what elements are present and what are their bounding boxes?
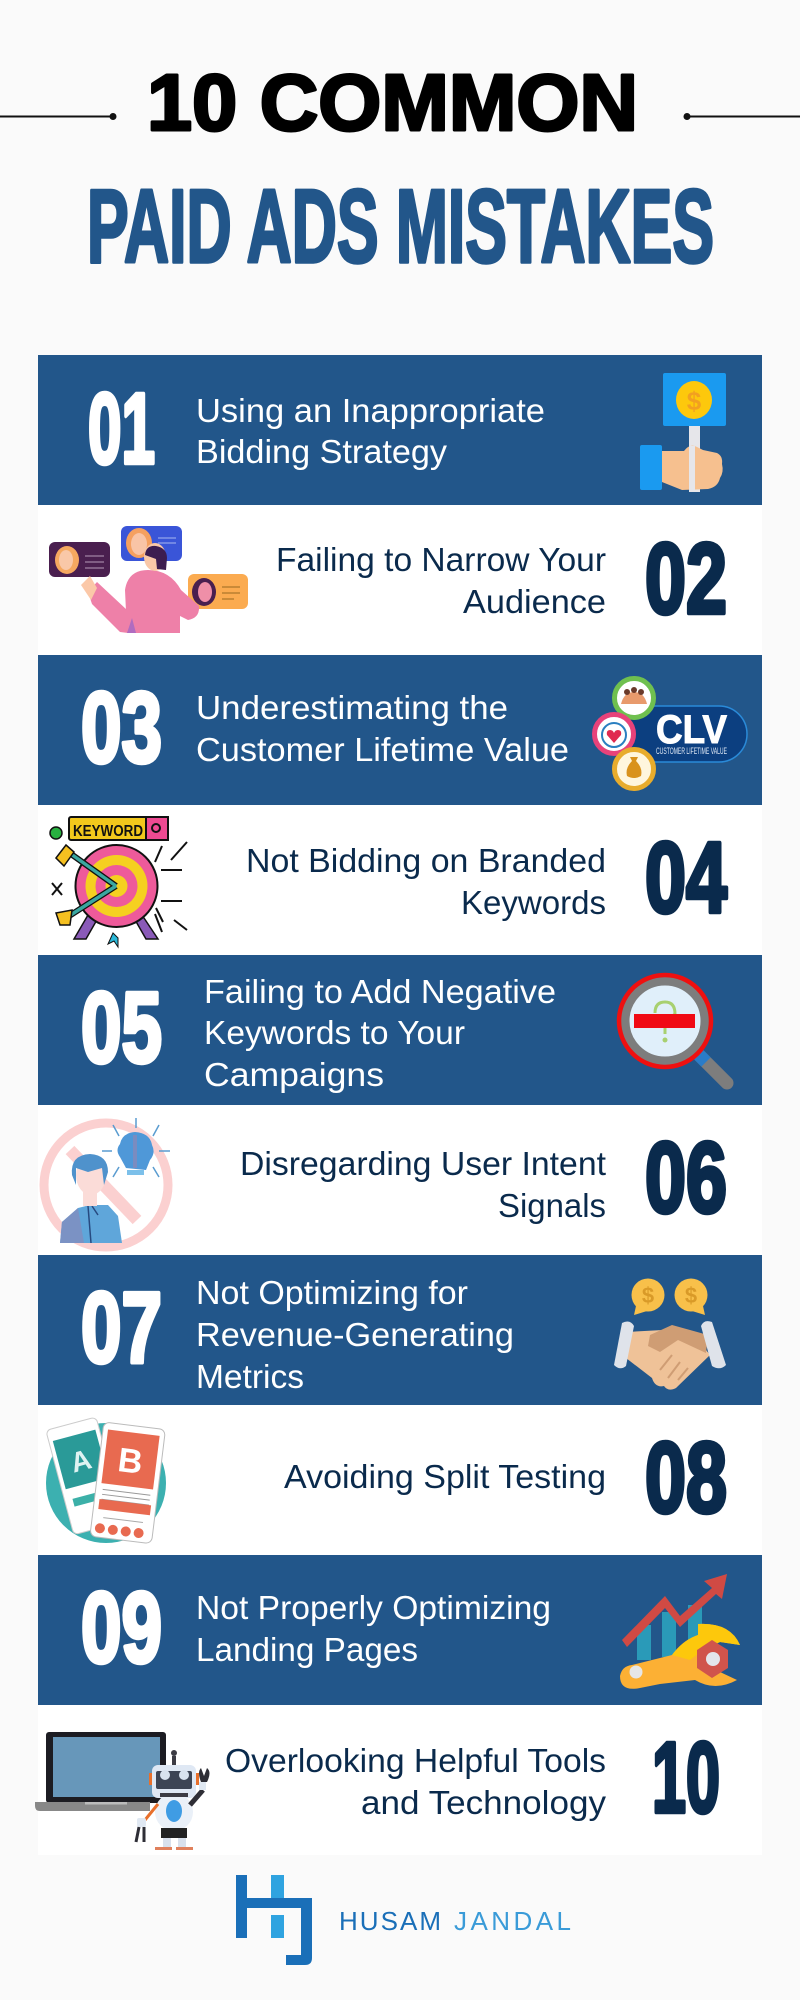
heading: 10 common: [0, 58, 800, 147]
number 02: 02: [645, 523, 727, 635]
text: mistake 02: Audience: [463, 583, 606, 620]
text: mistake 09: [196, 1589, 551, 1668]
text: mistake 01: Using an Inappropriate: [196, 392, 545, 429]
icon: growth chart and wrench: [620, 1574, 740, 1689]
panel: mistake 10: [35, 1705, 762, 1855]
text: mistake 05: Failing to Add Negative: [204, 973, 556, 1010]
text: mistake 05: Keywords to Your: [204, 1014, 465, 1051]
text: mistake 06: Disregarding User Intent: [240, 1145, 606, 1182]
panel: mistake 04: [38, 805, 762, 955]
icon: CLV badge: CUSTOMER LIFETIME VALUE: [656, 746, 727, 756]
icon: keyword target with arrows: KEYWORD: [73, 823, 143, 840]
icon: CLV badge: CLV: [656, 708, 727, 752]
number 09: 09: [81, 1572, 162, 1684]
text: mistake 10: [225, 1742, 607, 1821]
panel: mistake 06: [38, 1105, 762, 1255]
icon: person and brain in prohibition sign: [44, 1118, 170, 1247]
logo mark: [236, 1875, 312, 1965]
logo wordmark: JANDAL: [454, 1906, 571, 1936]
text: mistake 07: Not Optimizing for: [196, 1274, 468, 1311]
text: mistake 09: Landing Pages: [196, 1631, 418, 1668]
heading: 10 common: 10 COMMON: [147, 58, 638, 147]
text: mistake 05: [204, 973, 556, 1093]
number 06: 06: [645, 1122, 727, 1234]
text: mistake 07: Metrics: [196, 1358, 304, 1395]
text: mistake 03: [196, 689, 569, 768]
icon: A/B test phones: B: [116, 1441, 145, 1482]
number 08: 08: [645, 1422, 727, 1534]
text: mistake 06: [240, 1145, 606, 1224]
panel: mistake 01: [38, 355, 762, 505]
number 05: 05: [81, 972, 162, 1084]
text: mistake 01: [196, 392, 545, 470]
number 03: 03: [81, 672, 162, 784]
icon: A/B test phones: [46, 1417, 166, 1544]
logo wordmark: HUSAM: [339, 1906, 441, 1936]
panel: mistake 08: [38, 1405, 762, 1555]
text: mistake 03: Underestimating the: [196, 689, 508, 726]
icon: magnifying glass with red bar: [619, 975, 727, 1083]
number 07: 07: [81, 1272, 162, 1384]
text: mistake 07: [196, 1274, 514, 1395]
text: mistake 04: Keywords: [461, 884, 606, 921]
icon: handshake with coin bubbles: $: [685, 1283, 697, 1308]
text: mistake 07: Revenue-Generating: [196, 1316, 514, 1353]
icon: person with audience cards: [49, 526, 248, 633]
title: [0, 58, 800, 285]
icon: laptop: [35, 1732, 166, 1811]
text: mistake 02: Failing to Narrow Your: [276, 541, 606, 578]
icon: A/B test phones: A: [67, 1443, 95, 1478]
text: mistake 03: Customer Lifetime Value: [196, 731, 569, 768]
logo: Husam Jandal: [236, 1875, 571, 1965]
icon: handshake with coin bubbles: [614, 1278, 726, 1390]
icon: CLV badge: [594, 678, 747, 788]
icon: handshake with coin bubbles: $: [642, 1283, 654, 1308]
number 10: 10: [652, 1722, 720, 1834]
text: mistake 10: Overlooking Helpful Tools: [225, 1742, 606, 1779]
text: mistake 02: [276, 541, 606, 620]
panel: mistake 07: [38, 1255, 762, 1405]
text: mistake 04: Not Bidding on Branded: [246, 842, 606, 879]
icon: keyword target with arrows: [50, 817, 187, 947]
text: mistake 01: Bidding Strategy: [196, 433, 448, 470]
icon: robot: [136, 1750, 210, 1850]
text: mistake 05: Campaigns: [204, 1056, 384, 1093]
text: mistake 08: Avoiding Split Testing: [284, 1458, 606, 1495]
text: mistake 06: Signals: [498, 1187, 606, 1224]
logo wordmark: [339, 1906, 571, 1936]
text: mistake 04: [246, 842, 606, 921]
text: mistake 10: and Technology: [361, 1784, 607, 1821]
icon: hand holding bid paddle: [640, 373, 726, 492]
panel: mistake 03: [38, 655, 762, 805]
panel: mistake 09: [38, 1555, 762, 1705]
icon: hand holding bid paddle: $: [687, 386, 702, 416]
panel: mistake 02: [38, 505, 762, 655]
number 01: 01: [88, 373, 155, 485]
panel: mistake 05: [38, 955, 762, 1105]
number 04: 04: [645, 822, 727, 934]
text: mistake 09: Not Properly Optimizing: [196, 1589, 551, 1626]
